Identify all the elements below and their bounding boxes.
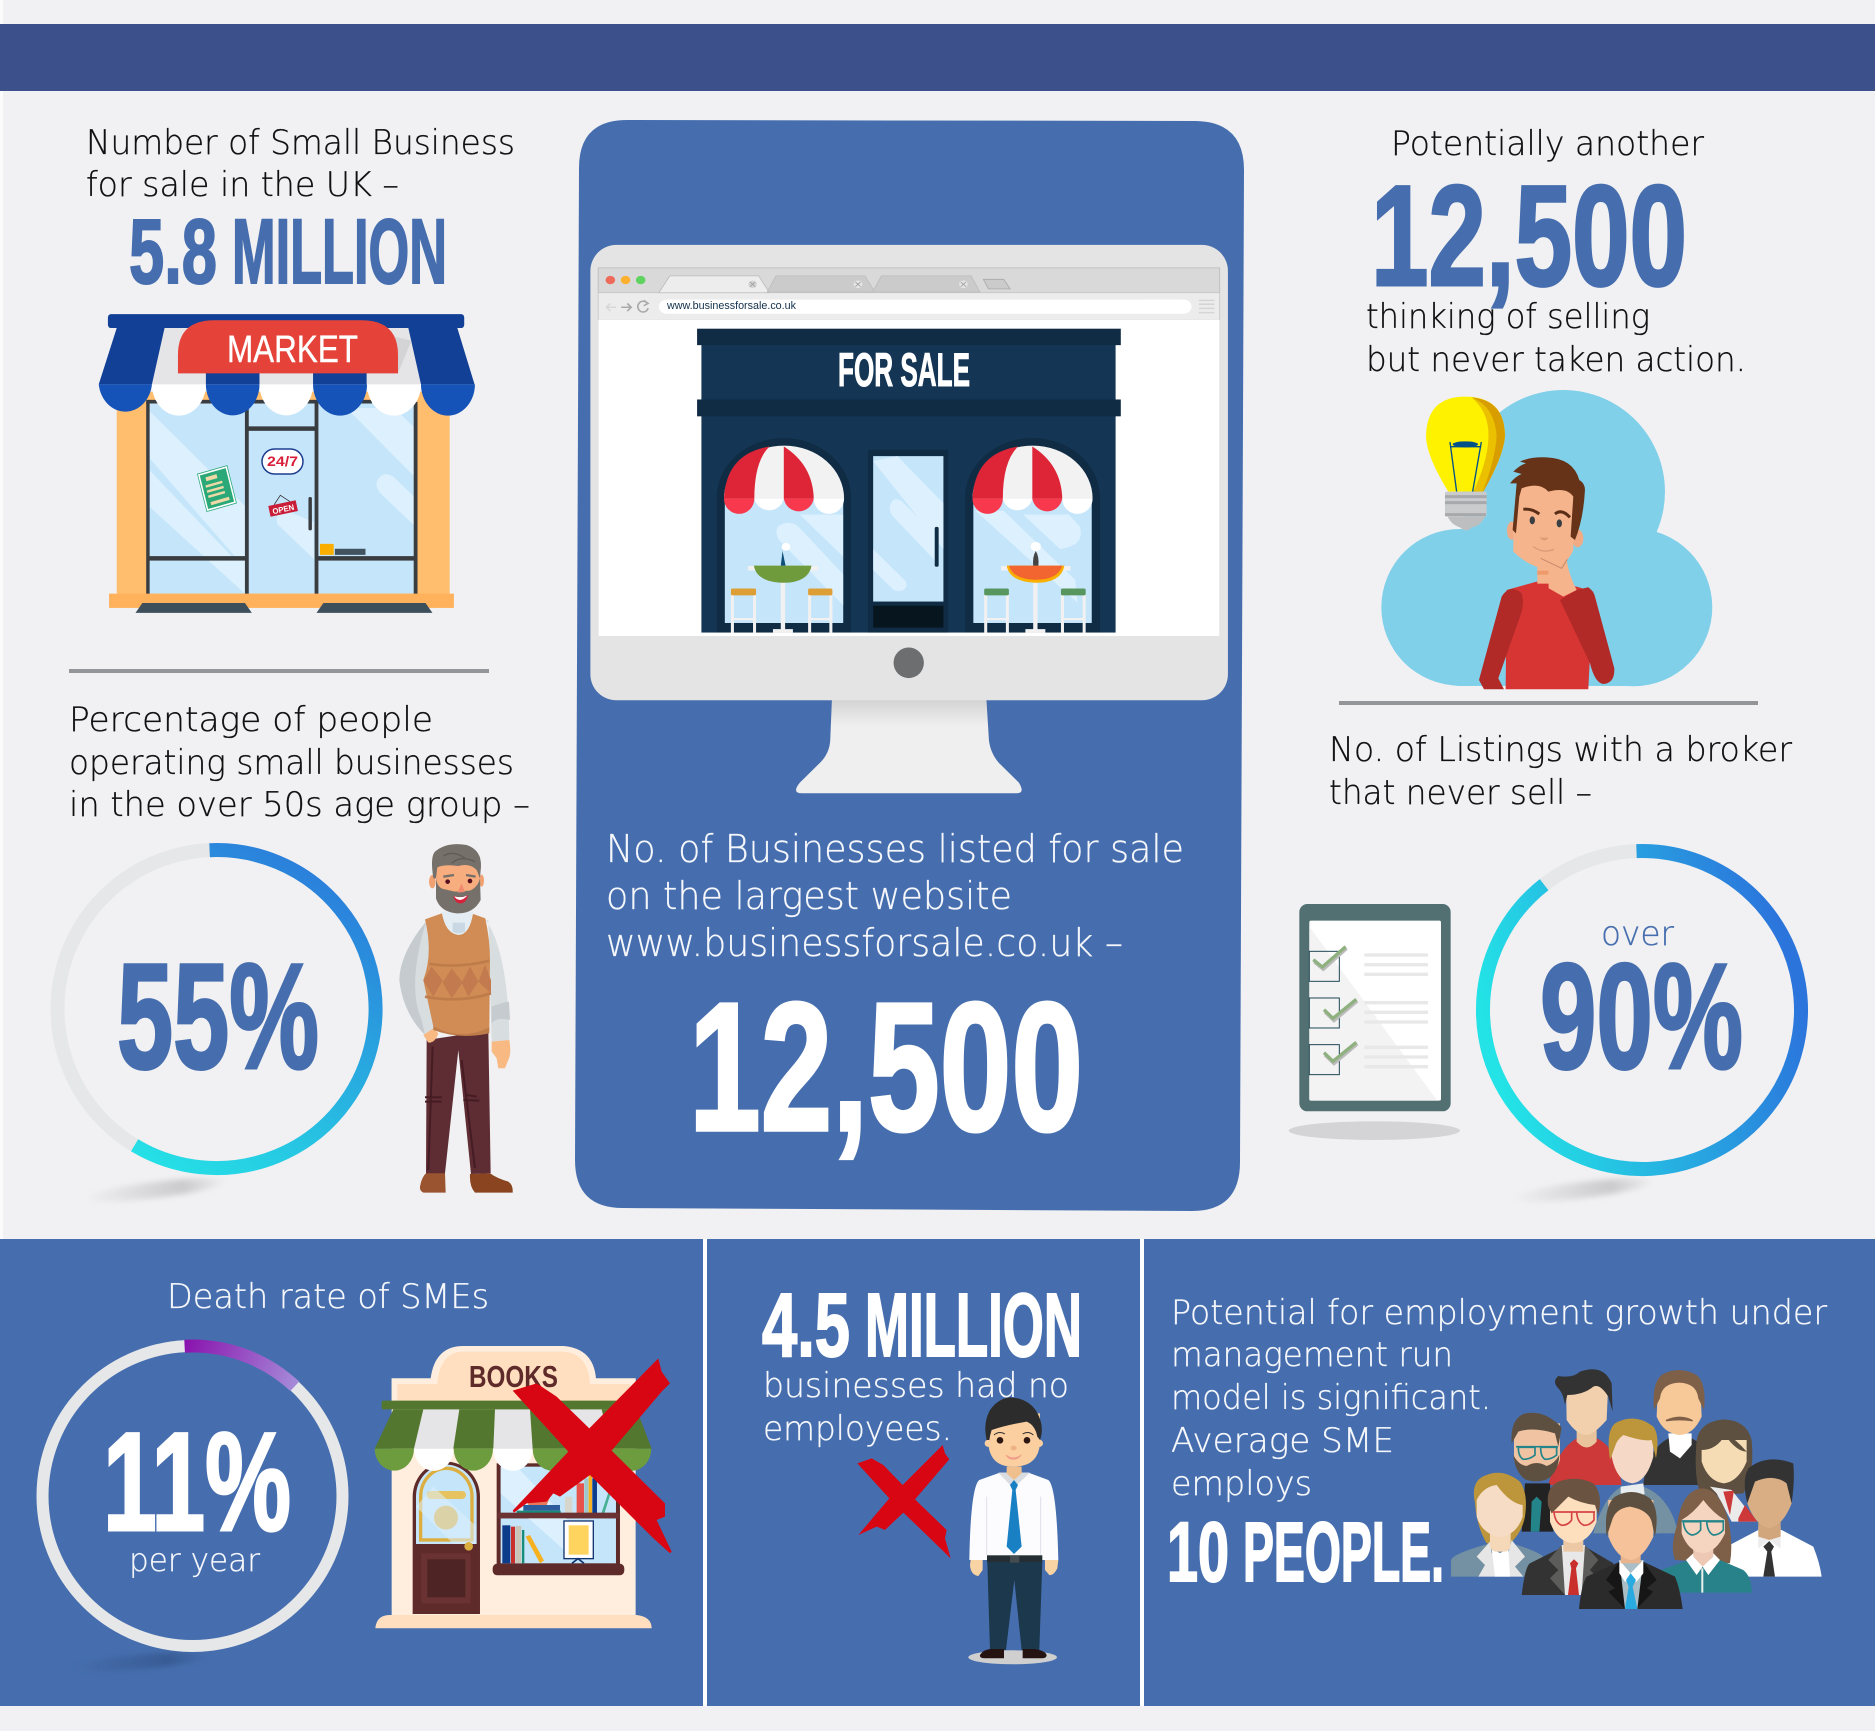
bulb xyxy=(1426,397,1505,492)
shop window xyxy=(497,1463,620,1567)
figure: 90%: 90% xyxy=(1540,932,1743,1100)
steps xyxy=(135,603,252,613)
tie xyxy=(1007,1480,1022,1554)
sign board xyxy=(178,320,398,373)
figure: 5.8 million: MILLION xyxy=(232,201,447,303)
ground shadow xyxy=(968,1650,1057,1664)
icon: group of people xyxy=(1451,1369,1822,1609)
head xyxy=(985,1440,992,1447)
sign text: books: BOOKS xyxy=(469,1359,558,1394)
divider left xyxy=(703,1239,707,1706)
text: largest website: on the largest website xyxy=(606,874,1012,918)
left cafe table xyxy=(781,580,785,631)
shop window glass xyxy=(147,402,417,594)
text: percentage of people: Percentage of people xyxy=(69,700,433,740)
left awning xyxy=(724,446,844,499)
text: number of small business: Number of Small Business xyxy=(86,123,515,163)
building xyxy=(392,1378,636,1617)
man xyxy=(1506,582,1593,689)
text: never sell: that never sell – xyxy=(1329,773,1592,813)
icon: clipboard checklist xyxy=(1289,904,1460,1140)
figure: 10 people xyxy=(1167,1505,1444,1599)
awning xyxy=(375,1409,652,1449)
person: dark hair white shirt xyxy=(1725,1459,1822,1577)
right cafe table xyxy=(1033,580,1038,631)
text: businesses had no: businesses had no xyxy=(763,1366,1069,1406)
left edge strip xyxy=(0,0,3,1240)
person: red shirt xyxy=(1548,1369,1622,1485)
figure: 10 people: PEOPLE. xyxy=(1243,1505,1444,1599)
monitor body xyxy=(590,245,1228,700)
door xyxy=(868,450,948,633)
text: no. of listings: No. of Listings with a broker xyxy=(1329,730,1792,770)
person: long hair woman xyxy=(1696,1419,1757,1522)
sign crown xyxy=(392,1346,636,1407)
text: age group: in the over 50s age group – xyxy=(69,785,530,825)
ring chart: 90% xyxy=(1483,851,1801,1169)
person: centre blue tie xyxy=(1579,1492,1683,1609)
figure: 11%: 11% xyxy=(103,1403,291,1560)
ring shadow xyxy=(68,1649,212,1675)
storefront xyxy=(701,342,1116,633)
figure: 5.8 million: 5.8 xyxy=(129,201,217,303)
floor xyxy=(109,594,454,608)
figure: 4.5 million: MILLION xyxy=(865,1276,1082,1376)
ring chart: 11% xyxy=(42,1346,342,1646)
top banner xyxy=(0,24,1875,91)
text: model is significant: model is significant. xyxy=(1171,1378,1491,1418)
panel: thinking of selling xyxy=(1366,124,1746,380)
sign shadow xyxy=(394,337,411,373)
red cross xyxy=(857,1445,951,1558)
panel: listed businesses text xyxy=(606,827,1184,1169)
figure: 12,500 white: 12,500 xyxy=(689,964,1083,1169)
door xyxy=(413,1462,480,1614)
figure: 4.5 million xyxy=(762,1276,1082,1376)
text: potentially another: Potentially another xyxy=(1391,124,1704,164)
right awning xyxy=(972,446,1093,499)
ring shadow right xyxy=(1511,1173,1655,1207)
text: death rate of SMEs: Death rate of SMEs xyxy=(167,1277,489,1317)
divider: left column xyxy=(69,669,489,673)
open sign: OPEN xyxy=(272,503,295,516)
figure: 4.5 million: 4.5 xyxy=(762,1276,850,1376)
figure: 10 people: 10 xyxy=(1167,1505,1229,1599)
panel: listings that never sell xyxy=(1329,730,1792,813)
monitor stand xyxy=(796,698,1022,793)
shirt xyxy=(969,1473,1058,1560)
divider: right column xyxy=(1339,701,1758,705)
sticker 24/7 xyxy=(262,449,303,474)
awning rail xyxy=(108,314,464,328)
person: teal woman xyxy=(1662,1488,1752,1593)
icon: older man xyxy=(399,844,513,1193)
text: average SME: Average SME xyxy=(1171,1421,1394,1461)
awning canopy xyxy=(152,328,421,384)
legs xyxy=(987,1562,1042,1650)
figure: 5.8 million xyxy=(129,201,447,303)
panel: small business number xyxy=(86,123,515,303)
person: blond grey jacket xyxy=(1593,1418,1678,1533)
cloud xyxy=(1381,390,1712,686)
window notice green xyxy=(197,466,236,512)
sign text: MARKET xyxy=(227,329,358,371)
center panel background xyxy=(575,120,1244,1211)
bottom panel: band xyxy=(0,1239,1875,1706)
person: red glasses xyxy=(1522,1479,1618,1595)
text: never taken action: but never taken action. xyxy=(1366,340,1746,380)
figure: 55%: 55% xyxy=(117,932,319,1100)
person: mustache vest xyxy=(1643,1370,1707,1485)
icon: employee man with red cross xyxy=(857,1397,1058,1664)
collar xyxy=(998,1473,1030,1488)
text: thinking of selling: thinking of selling xyxy=(1366,297,1650,337)
ring shadow left xyxy=(83,1173,227,1207)
text: potential for employment: Potential for employment growth under xyxy=(1171,1293,1827,1333)
person: bearded glasses xyxy=(1511,1413,1562,1532)
open sign xyxy=(267,492,298,517)
text: url: www.businessforsale.co.uk – xyxy=(606,921,1123,965)
icon: market shop xyxy=(99,314,475,613)
text: over: over xyxy=(1601,914,1674,954)
figure: 12,500 blue: 12,500 xyxy=(1371,157,1687,316)
text: no. of businesses: No. of Businesses listed for sale xyxy=(606,827,1184,871)
text: employs: employs xyxy=(1171,1464,1312,1504)
window frame xyxy=(146,400,418,594)
text: management run: management run xyxy=(1171,1335,1453,1375)
icon: thinking man with lightbulb xyxy=(1381,390,1712,689)
panel: monitor illustration xyxy=(590,245,1228,793)
sticker 24/7: 24/7 xyxy=(267,453,298,469)
person: blond woman xyxy=(1451,1473,1545,1577)
books xyxy=(502,1525,510,1563)
text: per year: per year xyxy=(129,1541,261,1579)
text: for sale in the UK: for sale in the UK – xyxy=(86,165,399,205)
base xyxy=(375,1615,652,1628)
panel: employment growth xyxy=(1167,1293,1827,1599)
browser url text: www.businessforsale.co.uk xyxy=(666,300,796,312)
divider right xyxy=(1140,1239,1144,1706)
text: operating small businesses: operating small businesses xyxy=(69,743,514,783)
browser window xyxy=(598,268,1220,293)
panel: no employees xyxy=(762,1276,1082,1449)
red cross: books xyxy=(513,1358,672,1553)
panel: death rate xyxy=(42,1277,489,1675)
power button xyxy=(894,647,924,678)
text: employees: employees. xyxy=(763,1409,952,1449)
yellow box and shelf bar xyxy=(320,544,334,555)
panel: over 50s xyxy=(69,700,530,825)
pillars xyxy=(117,392,450,596)
icon: closed book shop xyxy=(375,1346,672,1628)
ring chart: 55% xyxy=(58,850,376,1168)
shop sign text: FOR SALE xyxy=(838,343,970,396)
